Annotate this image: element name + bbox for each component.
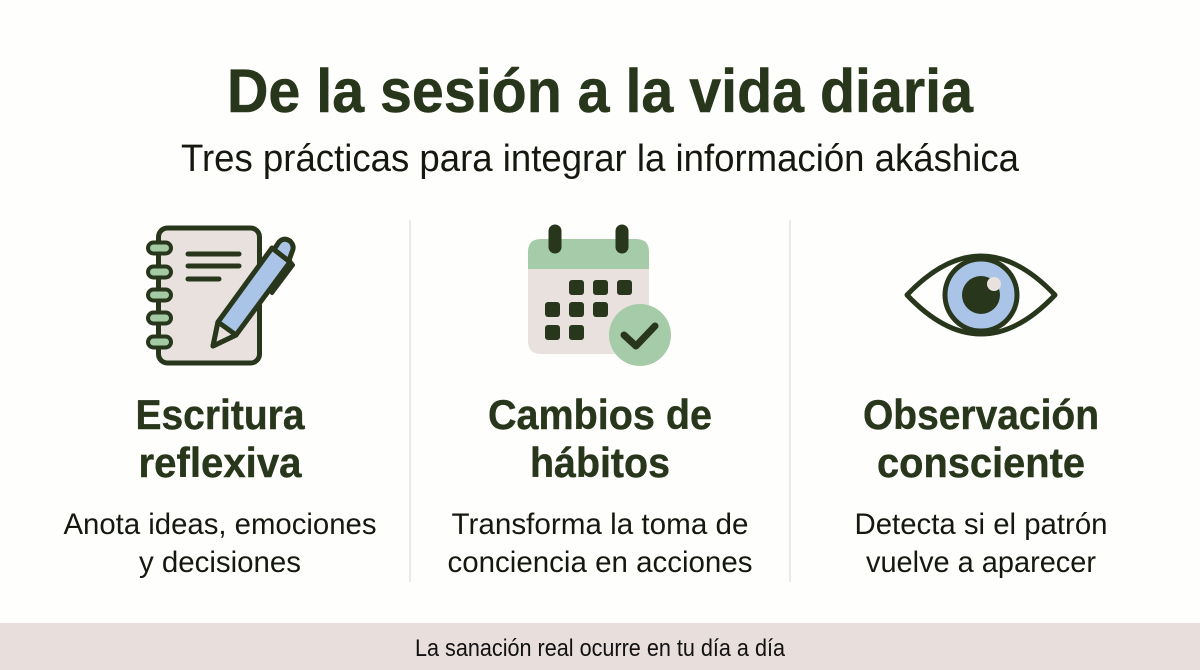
heading: escritura reflexiva: reflexiva: [138, 439, 302, 486]
text: cambios de habitos: conciencia en acciones: [448, 546, 752, 579]
heading: observacion consciente: [863, 391, 1099, 486]
panel: cambios de habitos: [448, 231, 752, 579]
panel: escritura reflexiva: [64, 228, 376, 579]
icon: calendar with check: [528, 231, 671, 366]
icon: notebook and pen: [148, 228, 293, 363]
subtitle: Tres prácticas para integrar la información akáshica: [181, 138, 1020, 180]
text: escritura reflexiva: y decisiones: [139, 546, 301, 579]
text: cambios de habitos: [448, 508, 752, 579]
footer band: [0, 623, 1200, 670]
panel: observacion consciente: [854, 256, 1108, 579]
text: observacion consciente: [854, 508, 1108, 579]
heading: cambios de habitos: Cambios de: [488, 391, 712, 438]
text: escritura reflexiva: [64, 508, 376, 579]
text: observacion consciente: Detecta si el patrón: [854, 508, 1108, 541]
text: escritura reflexiva: Anota ideas, emociones: [64, 508, 376, 541]
heading: escritura reflexiva: [136, 391, 305, 486]
text: cambios de habitos: Transforma la toma de: [452, 508, 748, 541]
title: De la sesión a la vida diaria: [227, 57, 974, 125]
icon: eye: [907, 256, 1055, 334]
heading: observacion consciente: consciente: [877, 439, 1085, 486]
text: observacion consciente: vuelve a aparecer: [866, 546, 1096, 579]
heading: escritura reflexiva: Escritura: [136, 391, 305, 438]
heading: cambios de habitos: hábitos: [530, 439, 670, 486]
heading: observacion consciente: Observación: [863, 391, 1099, 438]
heading: cambios de habitos: [488, 391, 712, 486]
footer band: La sanación real ocurre en tu día a día: [415, 635, 786, 662]
